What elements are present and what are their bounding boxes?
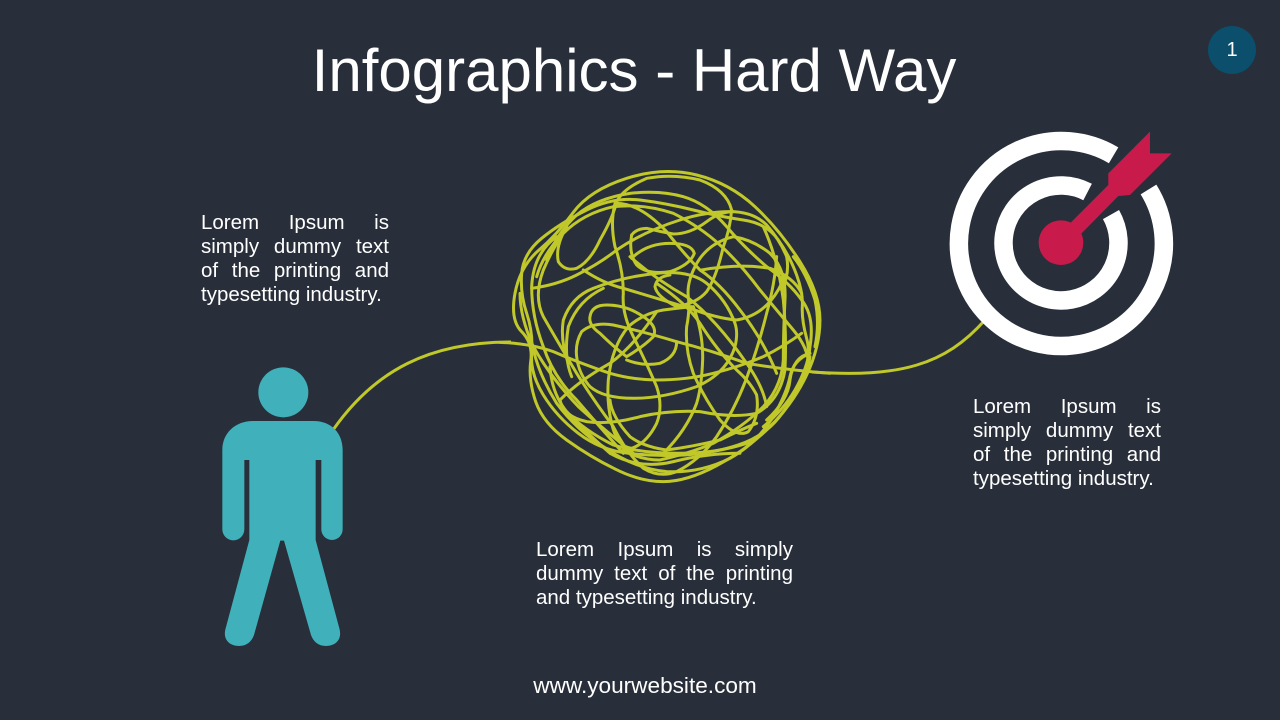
text block: right: Lorem Ipsum is xyxy=(973,395,1161,418)
text block: left xyxy=(201,211,389,306)
connector: person to tangle xyxy=(333,342,511,430)
icon: target with arrow xyxy=(959,132,1172,346)
icon: tangled scribble xyxy=(500,172,830,482)
text block: left: Lorem Ipsum is xyxy=(201,211,389,234)
text block: right: simply dummy text xyxy=(973,419,1161,442)
text block: left: simply dummy text xyxy=(201,235,389,258)
text block: right xyxy=(973,395,1161,490)
text block: center: dummy text of the printing xyxy=(536,562,793,585)
page number badge: 1 xyxy=(1226,39,1238,61)
text block: center: Lorem Ipsum is simply xyxy=(536,538,793,561)
footer website: www.yourwebsite.com xyxy=(533,673,757,698)
arrow xyxy=(1039,132,1172,265)
inner ring xyxy=(1003,185,1118,300)
text block: left: of the printing and xyxy=(201,259,389,282)
icon: person xyxy=(222,367,343,646)
outer ring xyxy=(959,141,1164,346)
text block: right: typesetting industry. xyxy=(973,467,1154,490)
text block: right: of the printing and xyxy=(973,443,1161,466)
title: Infographics - Hard Way xyxy=(312,37,956,104)
text block: center xyxy=(536,538,793,609)
page number badge xyxy=(1208,26,1256,74)
connector: tangle to target xyxy=(812,320,985,373)
text block: center: and typesetting industry. xyxy=(536,586,757,609)
text block: left: typesetting industry. xyxy=(201,283,382,306)
